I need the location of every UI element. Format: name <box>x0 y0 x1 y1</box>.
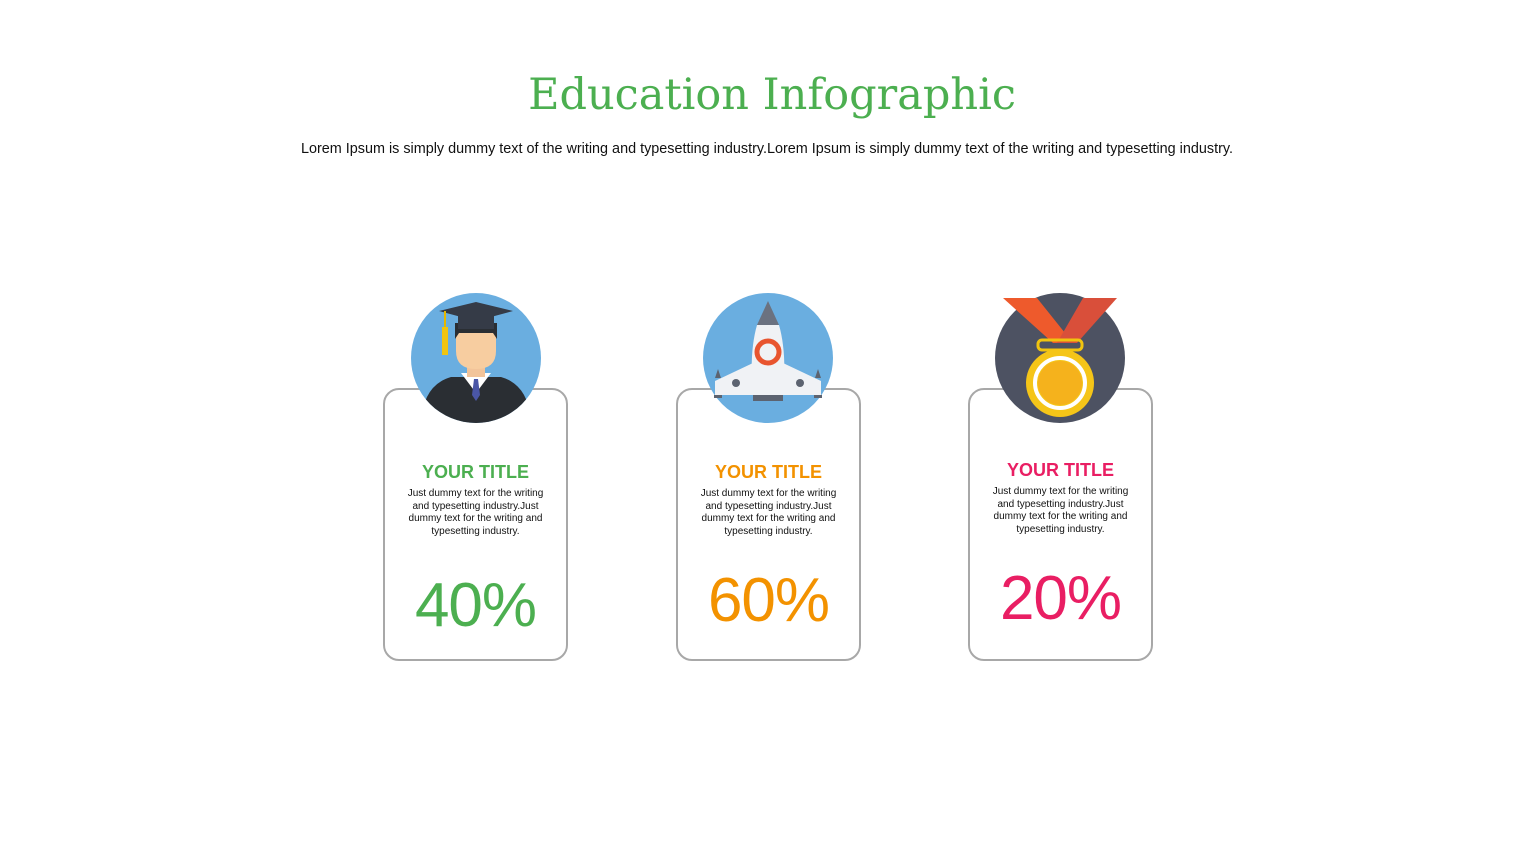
card text: Just dummy text for the writing <box>701 488 836 499</box>
card text: and typesetting industry.Just <box>412 500 538 512</box>
card text: dummy text for the writing and <box>409 513 542 524</box>
panel: card 3 <box>968 388 1153 661</box>
icon: rocket <box>703 293 833 423</box>
card text: typesetting industry. <box>1016 524 1105 534</box>
card text: typesetting industry. <box>724 526 813 536</box>
panel: card 1 <box>383 388 568 661</box>
icon: graduate <box>411 293 541 423</box>
card text <box>408 488 543 536</box>
icon: medal <box>995 293 1125 423</box>
card title: YOUR TITLE <box>715 462 822 482</box>
card text: dummy text for the writing and <box>994 511 1127 522</box>
title: Education Infographic <box>528 70 1016 120</box>
subtitle: Lorem Ipsum is simply dummy text of the writing and typesetting industry.Lorem Ipsum is simply dummy text of the writing and typesetting industry. <box>301 141 1233 157</box>
card text: and typesetting industry.Just <box>998 498 1124 510</box>
card title: YOUR TITLE <box>1007 460 1114 480</box>
card text <box>700 488 836 536</box>
card text: Just dummy text for the writing <box>993 486 1128 497</box>
card text: dummy text for the writing and <box>702 513 835 524</box>
percentage: 40% <box>415 571 536 640</box>
percentage: 60% <box>708 566 829 635</box>
card text <box>992 486 1128 534</box>
card text: Just dummy text for the writing <box>408 488 543 499</box>
percentage: 20% <box>1000 564 1121 633</box>
card text: typesetting industry. <box>431 526 520 536</box>
card text: and typesetting industry.Just <box>706 500 832 512</box>
panel: card 2 <box>676 388 861 661</box>
card title: YOUR TITLE <box>422 462 529 482</box>
